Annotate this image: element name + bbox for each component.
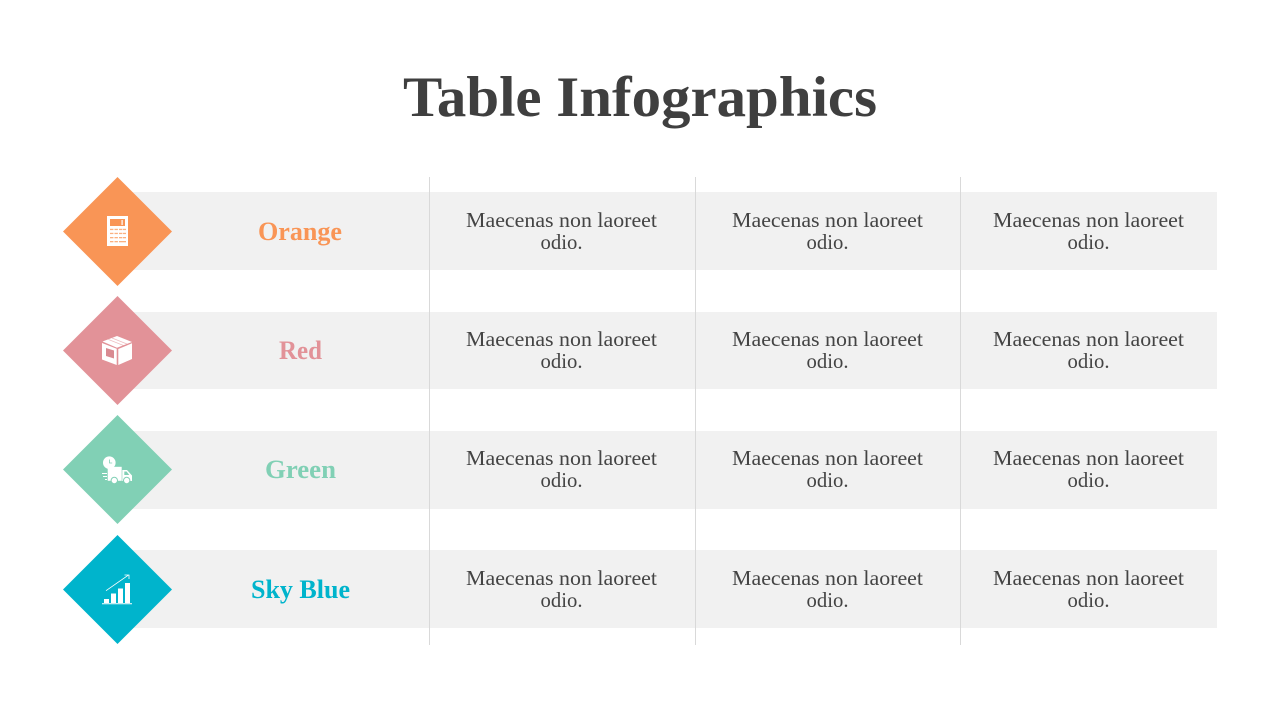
cell: Orange column 2 (732, 208, 923, 254)
icon: box (102, 336, 132, 365)
cell: Red column 1: Maecenas non laoreet (466, 327, 657, 351)
cell: Orange column 3: Maecenas non laoreet (993, 208, 1184, 232)
cell: Green column 1: odio. (540, 468, 582, 492)
cell: Sky Blue column 1: odio. (540, 588, 582, 612)
cell: Green column 3: Maecenas non laoreet (993, 446, 1184, 470)
cell: Orange column 2: odio. (806, 230, 848, 254)
cell: Green column 1: Maecenas non laoreet (466, 446, 657, 470)
icon: calculator (107, 216, 128, 246)
cell: Red column 3 (993, 327, 1184, 373)
cell: Sky Blue column 3: Maecenas non laoreet (993, 566, 1184, 590)
cell: Sky Blue column 3: odio. (1068, 588, 1110, 612)
cell: Green column 3: odio. (1068, 468, 1110, 492)
cell: Orange column 3 (993, 208, 1184, 254)
cell: Red column 2: Maecenas non laoreet (732, 327, 923, 351)
diamond: Red (63, 296, 172, 405)
title: Table Infographics (403, 66, 877, 129)
label: Green: Green (265, 455, 337, 484)
row band: Orange (117, 192, 1217, 270)
cell: Green column 2 (732, 446, 923, 492)
cell: Sky Blue column 2: Maecenas non laoreet (732, 566, 923, 590)
cell: Sky Blue column 1 (466, 566, 657, 612)
cell: Orange column 3: odio. (1068, 230, 1110, 254)
diamond: Orange (63, 177, 172, 286)
label: Red: Red (279, 336, 323, 365)
label: Orange: Orange (258, 217, 342, 246)
cell: Red column 3: odio. (1068, 349, 1110, 373)
cell: Orange column 1: odio. (540, 230, 582, 254)
cell: Orange column 2: Maecenas non laoreet (732, 208, 923, 232)
diamond: Sky Blue (63, 535, 172, 644)
icon: growth chart (102, 575, 132, 604)
cell: Green column 2: odio. (806, 468, 848, 492)
cell: Green column 2: Maecenas non laoreet (732, 446, 923, 470)
cell: Sky Blue column 2 (732, 566, 923, 612)
cell: Sky Blue column 3 (993, 566, 1184, 612)
cell: Sky Blue column 2: odio. (806, 588, 848, 612)
cell: Red column 1: odio. (540, 349, 582, 373)
diamond: Green (63, 415, 172, 524)
cell: Red column 1 (466, 327, 657, 373)
row band: Sky Blue (117, 550, 1217, 628)
cell: Orange column 1 (466, 208, 657, 254)
row band: Green (117, 431, 1217, 509)
cell: Red column 2 (732, 327, 923, 373)
row band: Red (117, 312, 1217, 389)
cell: Red column 3: Maecenas non laoreet (993, 327, 1184, 351)
cell: Orange column 1: Maecenas non laoreet (466, 208, 657, 232)
label: Sky Blue: Sky Blue (251, 575, 350, 604)
cell: Green column 1 (466, 446, 657, 492)
cell: Green column 3 (993, 446, 1184, 492)
cell: Red column 2: odio. (806, 349, 848, 373)
cell: Sky Blue column 1: Maecenas non laoreet (466, 566, 657, 590)
icon: delivery truck (102, 456, 132, 484)
